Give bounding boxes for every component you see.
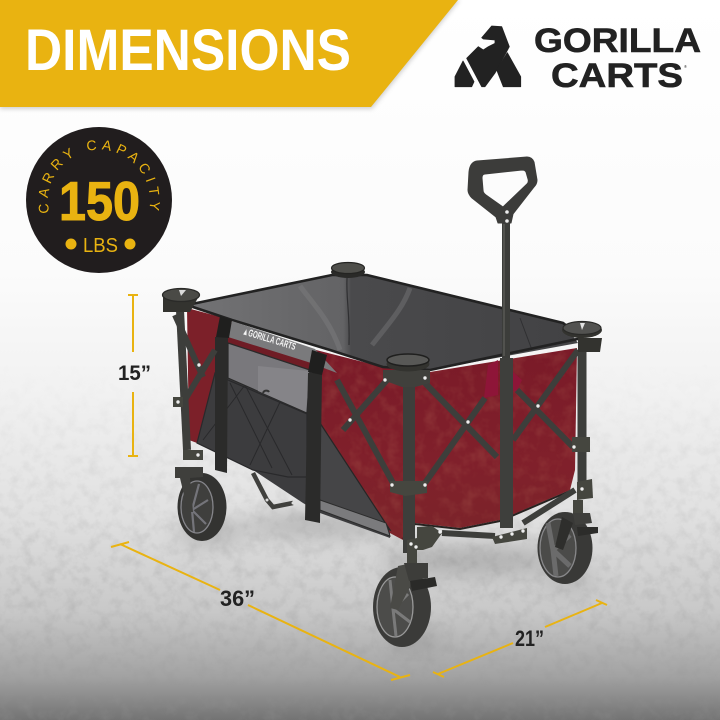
height dimension: 15” — [118, 362, 151, 385]
x braces — [175, 315, 578, 523]
caster fork — [390, 563, 412, 610]
ground shadow — [176, 513, 596, 648]
frame rivets — [176, 347, 584, 549]
pocket — [228, 343, 310, 413]
wagon — [162, 157, 602, 648]
red behind pocket — [228, 335, 316, 378]
length dimension: 36” — [220, 586, 255, 611]
net pocket edge — [197, 373, 307, 477]
lower gray strip — [320, 500, 390, 536]
badge unit: LBS — [83, 235, 118, 257]
interior folds — [300, 278, 532, 350]
brand logo: ® — [684, 64, 687, 69]
wheel: front — [373, 563, 437, 647]
width dimension: 21” — [515, 626, 544, 651]
badge number: 150 — [59, 170, 140, 232]
label band: ▲GORILLA CARTS — [241, 326, 297, 353]
length dimension — [111, 542, 410, 680]
cup holder: rear left — [162, 288, 200, 312]
wheel: rear left — [175, 467, 226, 541]
pocket handle — [263, 391, 269, 393]
pull handle — [468, 157, 537, 528]
background — [0, 324, 720, 720]
brand logo — [455, 22, 701, 95]
bottom bar — [442, 533, 495, 536]
rim edge — [187, 275, 582, 370]
fold mechanism — [253, 473, 294, 507]
brake pedal — [410, 577, 437, 591]
fabric fold — [484, 360, 498, 398]
bottom hem — [403, 491, 570, 539]
red rear panel — [187, 308, 232, 443]
title: DIMENSIONS — [25, 18, 351, 83]
width dimension — [433, 600, 607, 677]
red side panel — [315, 345, 585, 545]
capacity badge — [26, 127, 172, 273]
frame brackets — [173, 397, 593, 564]
legs — [180, 310, 582, 553]
interior fabric — [187, 275, 578, 370]
icon: gorilla — [455, 26, 521, 87]
cup holder: front — [383, 354, 430, 387]
pocket fold — [258, 366, 309, 412]
header banner — [0, 0, 460, 109]
height dimension — [118, 295, 151, 456]
end panel net — [197, 345, 390, 538]
cup holder: right — [562, 322, 602, 352]
wheel: rear right — [538, 512, 592, 584]
brand logo: CARTS — [551, 57, 683, 95]
caster: rear right — [555, 513, 598, 550]
cup holder: rear center — [331, 262, 365, 278]
badge unit — [66, 235, 136, 257]
wordmark: GORILLA — [534, 22, 701, 60]
caster top — [404, 563, 428, 581]
straps — [215, 316, 327, 523]
fork — [175, 467, 203, 512]
triangular net — [307, 423, 390, 530]
label band — [228, 321, 337, 373]
frame — [175, 310, 582, 553]
badge arc label: CARRY CAPACITY — [38, 140, 160, 213]
net seams — [203, 383, 292, 475]
